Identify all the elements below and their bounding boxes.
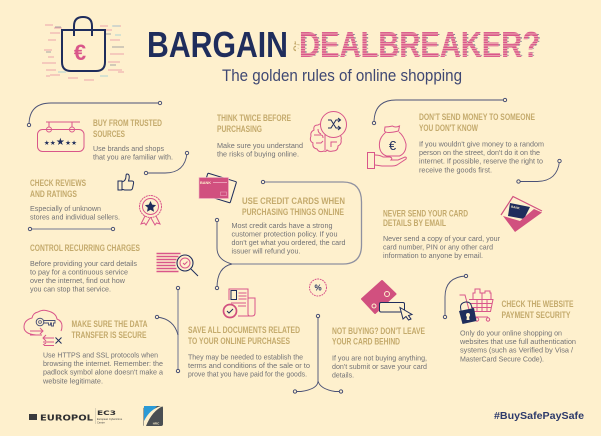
icon: percent badge: %: [314, 284, 322, 292]
icon: credit card with cursor: [362, 277, 412, 320]
body: Before providing your card details: [30, 261, 138, 268]
title word: dealbreaker: DEALBREAKER?: [299, 24, 540, 65]
connector: top left: [27, 101, 162, 127]
icon: money bag on hand: €: [389, 138, 397, 153]
icon: bank card: [199, 173, 237, 203]
body line 2: that you are familiar with.: [93, 154, 173, 162]
body line 4: issuer will refund you.: [232, 248, 301, 256]
body line 3: information to anyone by email.: [383, 253, 483, 260]
title word: bargain: BARGAIN: [147, 24, 288, 65]
connector: vertical documents: [155, 286, 180, 373]
logo: europol EC3: [29, 408, 123, 424]
panel: credit cards: [232, 196, 346, 256]
title word: or: or: [290, 40, 303, 53]
heading: BUY FROM TRUSTED: [93, 118, 162, 128]
heading: THINK TWICE BEFORE: [217, 113, 291, 123]
heading: CHECK THE WEBSITE: [502, 299, 574, 309]
body line 3: systems (such as Verified by Visa /: [460, 348, 573, 354]
icon: hanging sign with stars: ★★★★★: [44, 137, 77, 148]
heading: SAVE ALL DOCUMENTS RELATED: [188, 325, 300, 335]
body line 2: person on the street, don't do it on the: [419, 150, 540, 157]
heading line 2: PAYMENT SECURITY: [502, 310, 570, 320]
panel: website payment security: [459, 299, 576, 364]
europol emblem: [29, 414, 37, 420]
body: Use brands and shops: [93, 146, 165, 153]
connector: payment security: [443, 274, 468, 319]
icon: shopping bag with euro: €: [74, 40, 86, 65]
body: They may be needed to establish the: [188, 354, 303, 362]
ec3 wordmark: EC3: [97, 409, 116, 417]
heading: NEVER SEND YOUR CARD: [383, 208, 468, 218]
body line 2: card number, PIN or any other card: [383, 244, 493, 252]
heading: DON'T SEND MONEY TO SOMEONE: [419, 112, 535, 122]
ec3 caption: European Cybercrime: [97, 417, 123, 421]
subtitle: The golden rules of online shopping: [222, 66, 462, 85]
heading line 2: SOURCES: [93, 129, 125, 139]
body: Especially of unknown: [30, 206, 101, 213]
body line 2: browsing the internet. Remember: the: [43, 361, 163, 368]
panel: data transfer: [42, 319, 163, 386]
body line 4: website legitimate.: [42, 378, 103, 386]
body: If you are not buying anything,: [332, 356, 427, 362]
body line 4: receive the goods first.: [419, 168, 492, 174]
hashtag: #BuySafePaySafe: [494, 410, 584, 422]
icon: hanging sign with stars: [38, 122, 84, 152]
connector: bottom fork: [293, 314, 343, 393]
body: If you wouldn't give money to a random: [419, 142, 544, 148]
logo: HRC badge: [144, 406, 163, 426]
heading: CHECK REVIEWS: [30, 178, 86, 188]
body line 2: websites that use full authentication: [459, 339, 576, 346]
icon: rosette with star: [140, 196, 162, 225]
icon: document with check: [224, 289, 255, 318]
body line 3: prove that you have paid for the goods.: [188, 372, 307, 378]
body line 2: to pay for a continuous service: [30, 270, 128, 276]
title: [147, 24, 546, 65]
heading line 2: YOU DON'T KNOW: [419, 123, 478, 133]
icon: shopping cart with padlock: [459, 289, 493, 324]
panel: don't send money: [419, 112, 544, 174]
heading: CONTROL RECURRING CHARGES: [30, 243, 140, 253]
title glitch shadow: DEALBREAKER?: [300, 24, 542, 65]
panel: check reviews: [30, 178, 120, 222]
icon: thumbs up: [118, 174, 134, 190]
body line 2: terms and conditions of the sale or to: [188, 363, 310, 370]
body line 2: customer protection policy. If you: [232, 232, 338, 238]
body line 3: internet. If possible, reserve the right to: [419, 158, 543, 166]
heading line 2: TRANSFER IS SECURE: [72, 330, 146, 340]
icon: envelope with card: [501, 196, 542, 232]
icon: magnifier over striped list: [156, 254, 198, 276]
body line 3: don't get what you ordered, the card: [232, 240, 346, 247]
body: Never send a copy of your card, your: [383, 236, 501, 243]
connector: top right: [372, 98, 507, 125]
icon: money bag on hand: [368, 126, 406, 168]
heading: USE CREDIT CARDS WHEN: [242, 196, 345, 206]
panel: think twice: [217, 113, 303, 158]
panel: buy from trusted sources: [93, 118, 173, 162]
connector: reviews: [144, 151, 189, 175]
heading: MAKE SURE THE DATA: [72, 319, 148, 329]
heading line 2: PURCHASING THINGS ONLINE: [242, 207, 344, 217]
body line 3: details.: [332, 372, 354, 380]
heading line 2: PURCHASING: [217, 124, 262, 134]
ec3 caption line 2: Centre: [97, 420, 105, 424]
body line 2: the risks of buying online.: [217, 152, 299, 158]
icon: bank card: BANK: [200, 181, 211, 185]
panel: not buying: [332, 326, 427, 380]
europol wordmark: EUROPOL: [40, 414, 93, 422]
panel: save documents: [188, 325, 310, 378]
body: Use HTTPS and SSL protocols when: [43, 352, 158, 360]
connector: recurring charges: [28, 227, 115, 231]
icon: shopping bag with euro: [42, 17, 124, 80]
body line 4: you can stop that service.: [30, 286, 111, 294]
body line 3: padlock symbol alone doesn't make a: [43, 370, 163, 376]
panel: never send card details: [383, 208, 501, 260]
connector: credit card box: [215, 180, 362, 290]
icon: cloud with key: [24, 310, 62, 346]
icon: brain with shuffle: [310, 112, 346, 152]
body line 3: over the internet, find out how: [30, 278, 126, 285]
body: Only do your online shopping on: [460, 330, 562, 338]
body: Make sure you understand: [217, 143, 303, 150]
body line 2: stores and individual sellers.: [30, 214, 120, 222]
icon: percent badge: [310, 279, 326, 296]
heading line 2: DETAILS BY EMAIL: [383, 218, 446, 228]
body line 2: don't submit or save your card: [332, 364, 427, 371]
icon: envelope with card: BANK: [511, 205, 521, 210]
panel: control recurring charges: [30, 243, 140, 294]
heading line 2: TO YOUR ONLINE PURCHASES: [188, 336, 290, 346]
body line 4: MasterCard Secure Code).: [460, 356, 544, 364]
body: Most credit cards have a strong: [232, 223, 333, 230]
heading line 2: AND RATINGS: [30, 189, 77, 199]
heading: NOT BUYING? DON'T LEAVE: [332, 326, 425, 336]
logo: HRC badge: HRC: [153, 422, 160, 426]
connector: money to email: [517, 159, 561, 183]
heading line 2: YOUR CARD BEHIND: [332, 336, 400, 346]
